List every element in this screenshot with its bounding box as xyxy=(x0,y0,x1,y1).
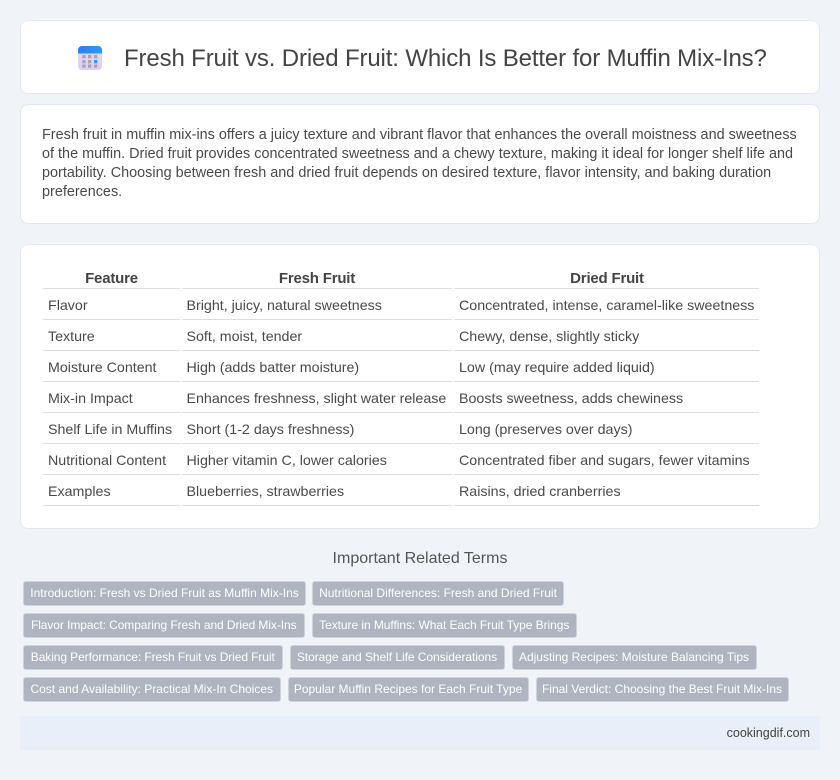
row: examples: Raisins, dried cranberries xyxy=(459,484,621,500)
tag: Flavor Impact: Comparing Fresh and Dried Mix-Ins xyxy=(31,618,297,632)
tag: Baking Performance: Fresh Fruit vs Dried Fruit xyxy=(31,650,275,664)
tag list: related terms xyxy=(23,581,789,702)
row: shelf life: Shelf Life in Muffins xyxy=(48,422,172,438)
row: moisture content: Moisture Content xyxy=(48,360,157,376)
row: examples xyxy=(43,484,759,506)
tag: Introduction: Fresh vs Dried Fruit as Muffin Mix-Ins xyxy=(30,586,299,600)
row: flavor: Flavor xyxy=(48,298,88,314)
intro text: of the muffin. Dried fruit provides concentrated sweetness and a chewy texture, making it ideal for longer shelf life and xyxy=(42,146,793,162)
row: flavor: Bright, juicy, natural sweetness xyxy=(186,298,382,314)
row: examples: Examples xyxy=(48,484,111,500)
row: mix-in impact xyxy=(43,391,759,413)
row: nutritional content: Higher vitamin C, lower calories xyxy=(186,453,387,469)
row: mix-in impact: Boosts sweetness, adds chewiness xyxy=(459,391,683,407)
row: texture xyxy=(43,329,759,351)
table header xyxy=(43,270,759,289)
tag: Cost and Availability: Practical Mix-In Choices xyxy=(30,682,273,696)
tag xyxy=(512,645,756,670)
row: moisture content xyxy=(43,360,759,382)
row: flavor: Concentrated, intense, caramel-like sweetness xyxy=(459,298,754,314)
row: examples: Blueberries, strawberries xyxy=(186,484,344,500)
tag: Adjusting Recipes: Moisture Balancing Tips xyxy=(519,650,749,664)
row: nutritional content: Concentrated fiber and sugars, fewer vitamins xyxy=(459,453,750,469)
tag: Nutritional Differences: Fresh and Dried Fruit xyxy=(319,586,557,600)
row: texture: Texture xyxy=(48,329,95,345)
row: moisture content: Low (may require added liquid) xyxy=(459,360,655,376)
heading: related terms: Important Related Terms xyxy=(333,550,507,567)
icon: calendar xyxy=(78,46,102,70)
table header: Dried Fruit xyxy=(570,270,644,287)
tag xyxy=(536,677,788,702)
intro text xyxy=(42,126,797,200)
intro text: portability. Choosing between fresh and dried fruit depends on desired texture, flavor intensity, and baking duration xyxy=(42,164,771,180)
tag xyxy=(23,581,306,606)
footer source text: cookingdif.com xyxy=(727,726,810,740)
tag: Storage and Shelf Life Considerations xyxy=(297,650,497,664)
tag xyxy=(290,645,504,670)
tag xyxy=(288,677,528,702)
row: mix-in impact: Enhances freshness, slight water release xyxy=(186,391,446,407)
panel: introduction xyxy=(20,104,820,224)
tag xyxy=(23,645,282,670)
table header: Fresh Fruit xyxy=(279,270,355,287)
tag xyxy=(312,581,564,606)
row: mix-in impact: Mix-in Impact xyxy=(48,391,133,407)
row: nutritional content xyxy=(43,453,759,475)
tag: Texture in Muffins: What Each Fruit Type Brings xyxy=(319,618,569,632)
intro text: preferences. xyxy=(42,184,122,200)
row: shelf life: Long (preserves over days) xyxy=(459,422,632,438)
tag: Final Verdict: Choosing the Best Fruit Mix-Ins xyxy=(542,682,782,696)
tag: Popular Muffin Recipes for Each Fruit Type xyxy=(294,682,522,696)
row: texture: Chewy, dense, slightly sticky xyxy=(459,329,639,345)
tag xyxy=(23,677,280,702)
footer xyxy=(20,716,820,750)
tag xyxy=(23,613,304,638)
title: Fresh Fruit vs. Dried Fruit: Which Is Better for Muffin Mix-Ins? xyxy=(124,45,767,72)
row: moisture content: High (adds batter moisture) xyxy=(186,360,359,376)
panel: header xyxy=(20,20,820,94)
row: texture: Soft, moist, tender xyxy=(186,329,302,345)
row: shelf life xyxy=(43,422,759,444)
tag xyxy=(312,613,577,638)
row: shelf life: Short (1-2 days freshness) xyxy=(186,422,354,438)
table header: Feature xyxy=(85,270,138,287)
row: nutritional content: Nutritional Content xyxy=(48,453,166,469)
panel: comparison table xyxy=(20,244,820,529)
row: flavor xyxy=(43,298,759,320)
intro text: Fresh fruit in muffin mix-ins offers a juicy texture and vibrant flavor that enhances the overall moistness and sweetness xyxy=(42,126,797,142)
